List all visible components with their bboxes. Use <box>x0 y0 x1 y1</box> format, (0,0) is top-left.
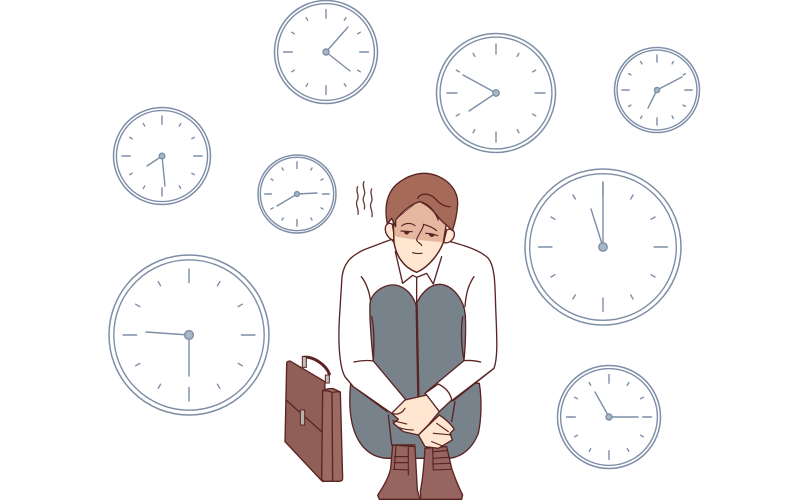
clock: centre left <box>258 155 336 233</box>
clock: right large <box>525 169 681 325</box>
clock: lower right <box>558 366 660 468</box>
collar <box>395 252 442 303</box>
clock: top middle right <box>436 33 556 152</box>
eyes <box>401 231 438 236</box>
legs lower <box>350 383 481 458</box>
hands <box>392 395 454 448</box>
icon: stress steam lines <box>356 182 372 217</box>
forehead shadow <box>393 200 447 242</box>
nose and mouth <box>413 225 424 254</box>
clock: top centre <box>274 1 378 104</box>
character and briefcase drawn in a 3x local coordinate system <box>285 173 497 499</box>
hair <box>386 173 458 231</box>
clock: top right <box>614 48 700 132</box>
shirt cuff <box>425 384 452 412</box>
boots <box>378 445 463 499</box>
face <box>393 200 447 272</box>
clock: lower left large <box>109 255 269 415</box>
eyebrows <box>402 223 437 231</box>
briefcase <box>285 357 343 482</box>
knees and shins <box>370 284 466 445</box>
ears <box>385 223 395 240</box>
clock: upper left <box>114 108 210 204</box>
head <box>385 173 458 272</box>
forearms <box>345 360 494 415</box>
shirt torso and arms <box>339 239 497 417</box>
